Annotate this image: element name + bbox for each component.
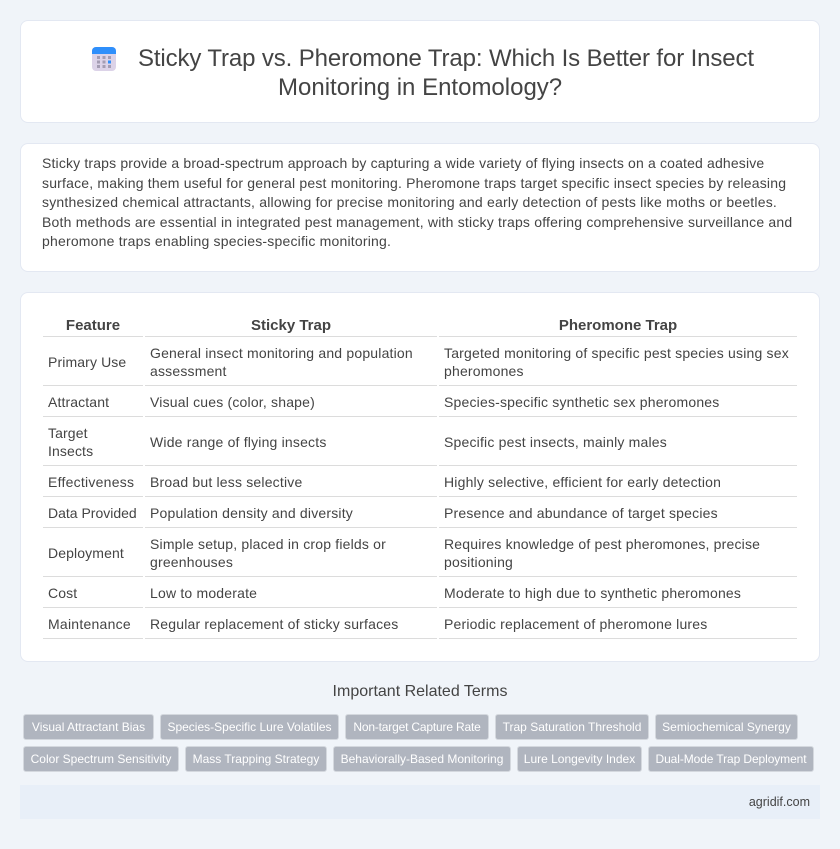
row: effectiveness: Broad but less selective — [150, 474, 302, 490]
row: primary use: Primary Use — [48, 354, 126, 370]
row: attractant — [48, 394, 719, 410]
table header — [66, 317, 677, 334]
footer text: agridif.com — [749, 795, 810, 809]
row: deployment: Simple setup, placed in crop fields or — [150, 536, 386, 552]
tags: related terms: Dual-Mode Trap Deployment — [656, 752, 806, 766]
tags: related terms: Semiochemical Synergy — [662, 720, 791, 734]
row: cost — [48, 585, 741, 601]
heading: related terms: Important Related Terms — [333, 683, 507, 700]
row: target insects: Insects — [48, 443, 93, 459]
table header: Feature — [66, 317, 120, 334]
row: cost: Moderate to high due to synthetic pheromones — [444, 585, 741, 601]
text block: summary: pheromone traps enabling species-specific monitoring. — [42, 233, 391, 249]
tags: related terms: Color Spectrum Sensitivity — [31, 752, 171, 766]
text block: summary: synthesized chemical attractants, allowing for precise monitoring and early detection of pests like moths or beetles. — [42, 194, 777, 210]
tags: related terms: Trap Saturation Threshold — [503, 720, 641, 734]
row: target insects — [48, 425, 667, 459]
row: primary use: Targeted monitoring of specific pest species using sex — [444, 345, 789, 361]
text block: summary — [42, 155, 792, 249]
row: effectiveness: Highly selective, efficient for early detection — [444, 474, 721, 490]
row: deployment: Requires knowledge of pest pheromones, precise — [444, 536, 760, 552]
table header: Pheromone Trap — [559, 317, 677, 334]
tags: related terms: Non-target Capture Rate — [353, 720, 481, 734]
row: attractant: Species-specific synthetic sex pheromones — [444, 394, 719, 410]
row: primary use: General insect monitoring and population — [150, 345, 413, 361]
footer — [20, 785, 820, 819]
row: target insects: Wide range of flying insects — [150, 434, 327, 450]
row: primary use: pheromones — [444, 363, 524, 379]
text block: summary: surface, making them useful for general pest monitoring. Pheromone traps target specific insect species by releasing — [42, 175, 786, 191]
tags: related terms: Species-Specific Lure Volatiles — [167, 720, 332, 734]
row: deployment: greenhouses — [150, 554, 233, 570]
title — [138, 45, 754, 101]
row: primary use: assessment — [150, 363, 227, 379]
row: attractant: Attractant — [48, 394, 109, 410]
row: deployment: positioning — [444, 554, 513, 570]
tags: related terms — [23, 714, 814, 772]
row: maintenance: Regular replacement of sticky surfaces — [150, 616, 398, 632]
row: data provided — [48, 505, 718, 521]
row: target insects: Target — [48, 425, 88, 441]
text block: summary: Sticky traps provide a broad-spectrum approach by capturing a wide variety of flying insects on a coated adhesive — [42, 155, 764, 171]
row: data provided: Data Provided — [48, 505, 137, 521]
panel: header — [20, 20, 820, 123]
tags: related terms: Visual Attractant Bias — [32, 720, 145, 734]
panel: comparison table — [20, 292, 820, 662]
row: maintenance: Maintenance — [48, 616, 131, 632]
row: primary use — [48, 345, 789, 379]
table: comparison — [43, 317, 797, 639]
row: maintenance: Periodic replacement of pheromone lures — [444, 616, 707, 632]
row: data provided: Population density and diversity — [150, 505, 353, 521]
title: Sticky Trap vs. Pheromone Trap: Which Is Better for Insect — [138, 45, 754, 72]
row: deployment — [48, 536, 760, 570]
row: data provided: Presence and abundance of target species — [444, 505, 718, 521]
row: attractant: Visual cues (color, shape) — [150, 394, 315, 410]
tags: related terms: Mass Trapping Strategy — [193, 752, 319, 766]
text block: summary: Both methods are essential in integrated pest management, with sticky traps offering comprehensive surveillance and — [42, 214, 792, 230]
row: effectiveness — [48, 474, 721, 490]
row: cost: Cost — [48, 585, 77, 601]
title: Monitoring in Entomology? — [278, 74, 562, 101]
row: cost: Low to moderate — [150, 585, 257, 601]
tags: related terms: Behaviorally-Based Monitoring — [341, 752, 503, 766]
tags: related terms: Lure Longevity Index — [524, 752, 635, 766]
row: maintenance — [48, 616, 707, 632]
row: effectiveness: Effectiveness — [48, 474, 134, 490]
panel: summary — [20, 143, 820, 272]
table header: Sticky Trap — [251, 317, 331, 334]
row: target insects: Specific pest insects, mainly males — [444, 434, 667, 450]
icon: calendar — [92, 47, 116, 71]
row: deployment: Deployment — [48, 545, 124, 561]
